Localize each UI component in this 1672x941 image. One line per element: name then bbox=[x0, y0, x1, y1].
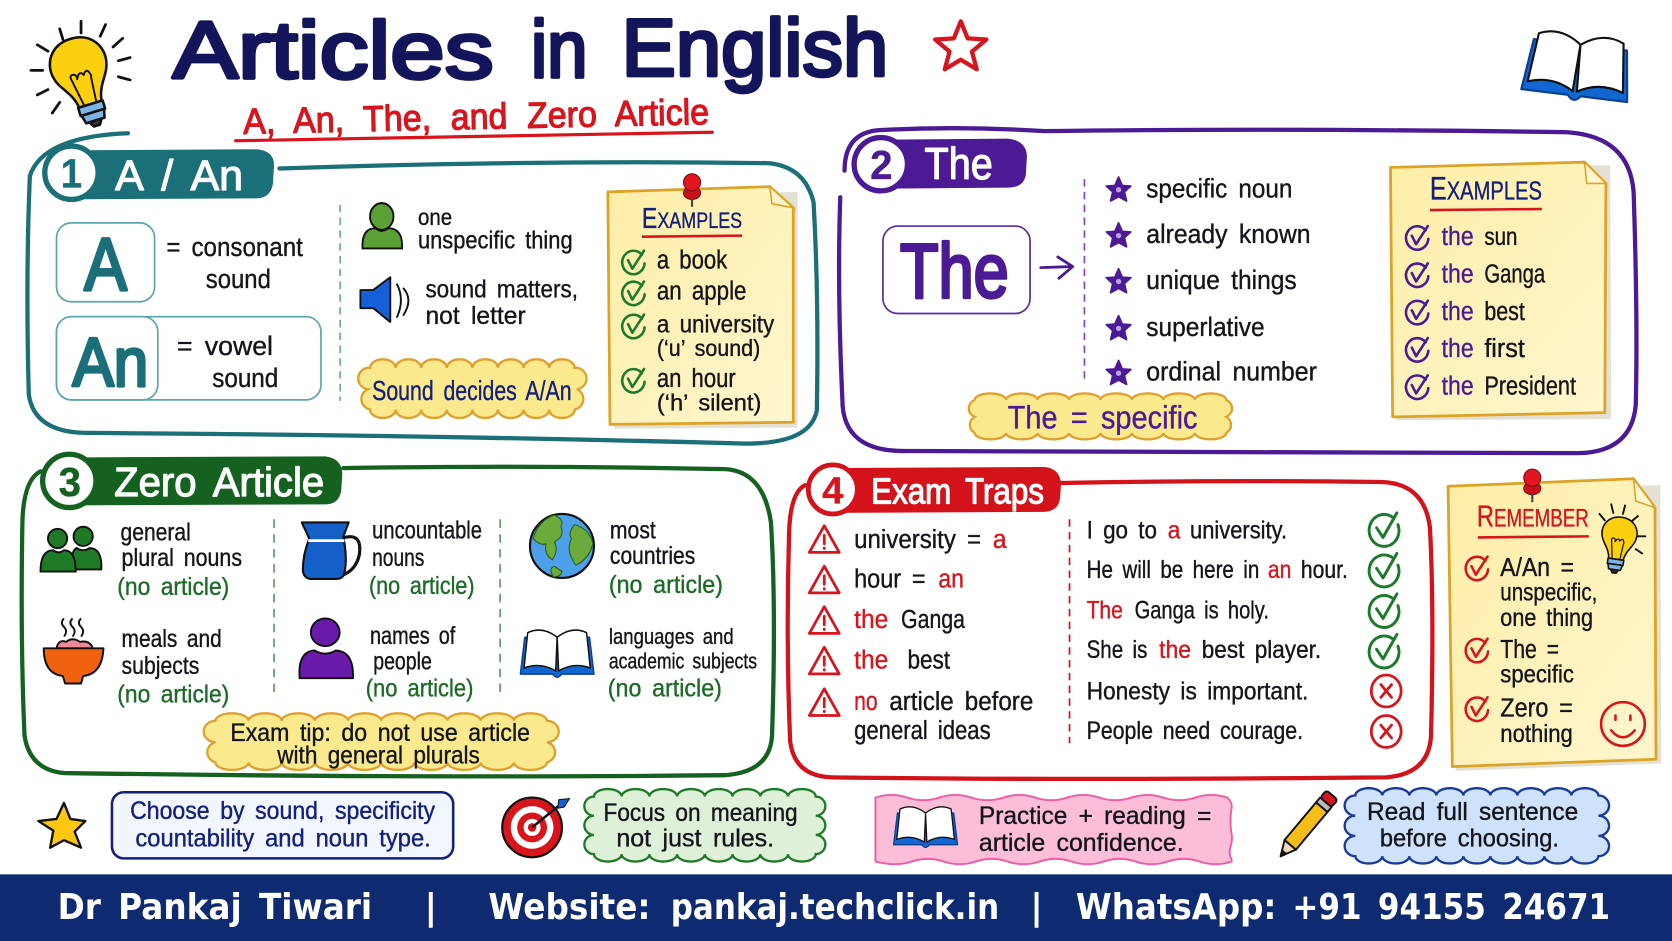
example items: the bbox=[1442, 298, 1474, 326]
example sentences: a bbox=[1168, 517, 1181, 544]
usage list bbox=[1106, 173, 1317, 387]
icon: small bulb bbox=[1597, 504, 1645, 575]
example sentences: He will be here in bbox=[1087, 557, 1259, 584]
remember items: Zero = bbox=[1500, 695, 1573, 723]
footer: whatsapp bbox=[1076, 887, 1610, 928]
usage list: specific noun bbox=[1146, 173, 1292, 203]
heading pill bbox=[854, 138, 1027, 191]
heading pill: The bbox=[925, 139, 993, 189]
icon: gold star bbox=[38, 803, 85, 848]
example sentences: best player. bbox=[1202, 637, 1321, 664]
item: names of people: people bbox=[373, 649, 432, 676]
panel border bbox=[839, 128, 1636, 453]
example items: (‘u’ sound) bbox=[657, 335, 760, 361]
remember items: A/An = bbox=[1500, 554, 1574, 582]
item: meals and subjects: subjects bbox=[122, 653, 199, 680]
item: languages and academic subjects bbox=[520, 624, 757, 702]
footer: separator: | bbox=[424, 887, 437, 928]
panel border bbox=[22, 467, 774, 776]
item: languages and academic subjects: (no article) bbox=[608, 675, 722, 702]
usage list: superlative bbox=[1146, 312, 1265, 342]
tip: choose by sound: countability and noun type. bbox=[135, 826, 431, 853]
tip: choose by sound bbox=[112, 792, 453, 858]
letter An box bbox=[57, 317, 321, 401]
title: Articles bbox=[173, 6, 494, 96]
header bbox=[31, 4, 1635, 142]
callout: the = specific bbox=[969, 393, 1232, 439]
footer: whatsapp: +91 94155 24671 bbox=[1292, 887, 1610, 928]
example items: sun bbox=[1484, 224, 1517, 251]
tip: read full sentence bbox=[1345, 788, 1609, 863]
trap list: hour = bbox=[854, 566, 926, 594]
tip: practice + reading bbox=[875, 795, 1232, 864]
example sentences: university. bbox=[1190, 517, 1287, 544]
text: A rule: sound bbox=[206, 264, 271, 294]
panel border bbox=[788, 481, 1432, 779]
example sentences: The bbox=[1087, 597, 1123, 624]
heading pill: 1 bbox=[61, 151, 82, 197]
item: most countries: countries bbox=[610, 543, 695, 570]
example items: the bbox=[1442, 373, 1474, 401]
item: most countries: (no article) bbox=[609, 572, 723, 599]
callout: sound decides bbox=[358, 359, 587, 418]
example items: best bbox=[1484, 298, 1525, 326]
tip: choose by sound: Choose by sound, specificity bbox=[130, 798, 436, 825]
trap list: general ideas bbox=[854, 717, 991, 745]
icon: red star bbox=[935, 21, 986, 69]
example items: an apple bbox=[657, 278, 746, 306]
example items: first bbox=[1484, 335, 1525, 363]
example sentences: I go to bbox=[1087, 517, 1157, 544]
remember items: nothing bbox=[1500, 721, 1573, 748]
icon: light bulb bbox=[31, 21, 130, 134]
example items: the bbox=[1442, 223, 1474, 251]
text: sound matters: sound matters, bbox=[425, 276, 578, 303]
callout: the = specific: The = specific bbox=[1008, 400, 1197, 436]
tip: focus on meaning: not just rules. bbox=[616, 826, 774, 853]
example sentences bbox=[1087, 517, 1348, 745]
trap list: best bbox=[907, 647, 950, 675]
remember heading: REMEMBER bbox=[1477, 499, 1589, 534]
title: English bbox=[622, 4, 888, 94]
text: one unspecific thing bbox=[418, 204, 573, 254]
tip: practice + reading: Practice + reading = bbox=[979, 803, 1211, 830]
item: names of people: (no article) bbox=[366, 675, 473, 702]
text: A rule: = consonant bbox=[166, 232, 303, 262]
heading pill: 2 bbox=[870, 142, 893, 188]
remember items bbox=[1466, 554, 1597, 748]
trap list: article before bbox=[889, 688, 1033, 716]
item: meals and subjects: (no article) bbox=[117, 682, 229, 709]
item: general plural nouns: (no article) bbox=[117, 574, 229, 601]
examples heading: EXAMPLES bbox=[642, 203, 742, 235]
heading pill: 3 bbox=[59, 459, 81, 505]
example items: (‘h’ silent) bbox=[657, 390, 761, 416]
footer: website: Website: bbox=[488, 887, 650, 928]
example items: the bbox=[1442, 335, 1474, 363]
example items: a book bbox=[657, 247, 727, 275]
item: meals and subjects: meals and bbox=[122, 626, 222, 653]
title: in bbox=[531, 5, 588, 95]
item: uncountable nouns: (no article) bbox=[369, 573, 475, 600]
subtitle: A, An, The, and Zero Article bbox=[243, 91, 709, 142]
examples heading: EXAMPLES bbox=[1430, 170, 1542, 206]
tip: focus on meaning: Focus on meaning bbox=[604, 800, 798, 827]
heading pill bbox=[808, 465, 1061, 514]
tip: read full sentence: Read full sentence bbox=[1367, 799, 1578, 826]
note: examples bbox=[608, 174, 798, 429]
trap list: no bbox=[854, 688, 878, 716]
example sentences: an bbox=[1268, 557, 1291, 584]
letter An box: sound bbox=[212, 363, 278, 393]
item: names of people bbox=[299, 618, 473, 702]
arrow bbox=[1041, 257, 1073, 278]
item: languages and academic subjects: languages and bbox=[609, 624, 734, 649]
letter A box: A bbox=[84, 222, 127, 306]
icon: pin bbox=[684, 174, 701, 207]
icon: smiley bbox=[1601, 702, 1645, 746]
trap list: a bbox=[993, 526, 1007, 554]
remember items: unspecific, bbox=[1500, 579, 1597, 606]
trap list: university = bbox=[854, 526, 981, 554]
trap list: the bbox=[854, 606, 888, 634]
The word box: The bbox=[900, 229, 1009, 314]
note: examples bbox=[1390, 162, 1611, 420]
example sentences: the bbox=[1159, 637, 1191, 664]
trap list bbox=[809, 526, 1033, 745]
title bbox=[173, 4, 888, 96]
item: most countries: most bbox=[610, 517, 656, 544]
footer: website: pankaj.techclick.in bbox=[671, 887, 999, 928]
callout: exam tip bbox=[204, 713, 559, 770]
trap list: an bbox=[938, 566, 964, 594]
text: one unspecific thing: unspecific thing bbox=[418, 227, 573, 254]
remember items: specific bbox=[1500, 661, 1574, 688]
letter An box: An bbox=[73, 325, 148, 401]
footer: whatsapp: WhatsApp: bbox=[1076, 887, 1276, 928]
usage list: already known bbox=[1146, 219, 1311, 249]
tips strip bbox=[38, 788, 1609, 864]
panel: Exam Traps bbox=[788, 465, 1432, 779]
heading pill: Exam Traps bbox=[871, 470, 1044, 511]
callout: sound decides: Sound decides A/An bbox=[372, 375, 572, 406]
example items: an hour bbox=[657, 365, 736, 393]
letter A box bbox=[57, 222, 155, 306]
heading pill: A / An bbox=[115, 152, 243, 200]
item: general plural nouns: plural nouns bbox=[122, 545, 242, 572]
usage list: ordinal number bbox=[1146, 357, 1317, 387]
text: sound matters bbox=[425, 276, 578, 330]
item: uncountable nouns: nouns bbox=[372, 545, 424, 572]
heading pill: 4 bbox=[822, 469, 844, 512]
text: sound matters: not letter bbox=[425, 303, 526, 330]
icon: pin bbox=[1524, 469, 1541, 502]
note: remember bbox=[1448, 469, 1661, 771]
example sentences: Ganga is holy. bbox=[1135, 597, 1269, 624]
item: most countries bbox=[530, 514, 723, 599]
example items: a university bbox=[657, 312, 775, 339]
text: A rule bbox=[166, 232, 303, 294]
item: meals and subjects bbox=[44, 618, 229, 709]
panel: A / An bbox=[27, 133, 817, 444]
letter An box: = vowel bbox=[177, 331, 273, 361]
example items bbox=[622, 247, 775, 416]
item: general plural nouns bbox=[41, 520, 242, 601]
footer: website bbox=[488, 887, 999, 928]
usage list: unique things bbox=[1146, 265, 1297, 295]
example sentences: hour. bbox=[1301, 557, 1348, 584]
trap list: Ganga bbox=[901, 606, 966, 634]
heading pill: Zero Article bbox=[114, 459, 324, 505]
example items bbox=[1406, 223, 1576, 401]
callout: exam tip: Exam tip: do not use article bbox=[230, 720, 530, 747]
panel: Zero Article bbox=[22, 454, 774, 776]
footer: name: Dr Pankaj Tiwari bbox=[58, 887, 372, 928]
icon: open book bbox=[1521, 28, 1635, 106]
panel: The bbox=[839, 128, 1636, 453]
remember items: The = bbox=[1500, 636, 1559, 664]
item: uncountable nouns bbox=[302, 517, 482, 600]
heading pill bbox=[45, 146, 274, 200]
example sentences: She is bbox=[1087, 637, 1147, 664]
example items: Ganga bbox=[1484, 261, 1546, 289]
callout: exam tip: with general plurals bbox=[276, 742, 480, 769]
footer bar bbox=[0, 874, 1672, 941]
icon: pencil bbox=[1275, 790, 1338, 861]
panel border bbox=[27, 133, 817, 444]
trap list: the bbox=[854, 647, 888, 675]
footer: separator: | bbox=[1030, 887, 1043, 928]
tip: read full sentence: before choosing. bbox=[1380, 826, 1559, 853]
text: one unspecific thing: one bbox=[418, 204, 452, 230]
item: languages and academic subjects: academic subjects bbox=[609, 649, 757, 674]
heading pill bbox=[43, 454, 342, 508]
tip: focus on meaning bbox=[584, 789, 825, 862]
icon: speaker bbox=[360, 277, 408, 322]
icon: target bbox=[502, 798, 569, 857]
example sentences: Honesty is important. bbox=[1087, 678, 1308, 705]
remember items: one thing bbox=[1500, 605, 1593, 632]
correct and wrong marks bbox=[1369, 513, 1401, 747]
example sentences: People need courage. bbox=[1087, 718, 1303, 745]
example items: the bbox=[1442, 261, 1474, 289]
item: general plural nouns: general bbox=[120, 520, 191, 547]
example items: President bbox=[1484, 373, 1576, 401]
tip: practice + reading: article confidence. bbox=[979, 830, 1184, 857]
item: names of people: names of bbox=[370, 623, 455, 650]
icon: person bbox=[362, 203, 402, 248]
item: uncountable nouns: uncountable bbox=[372, 517, 482, 544]
